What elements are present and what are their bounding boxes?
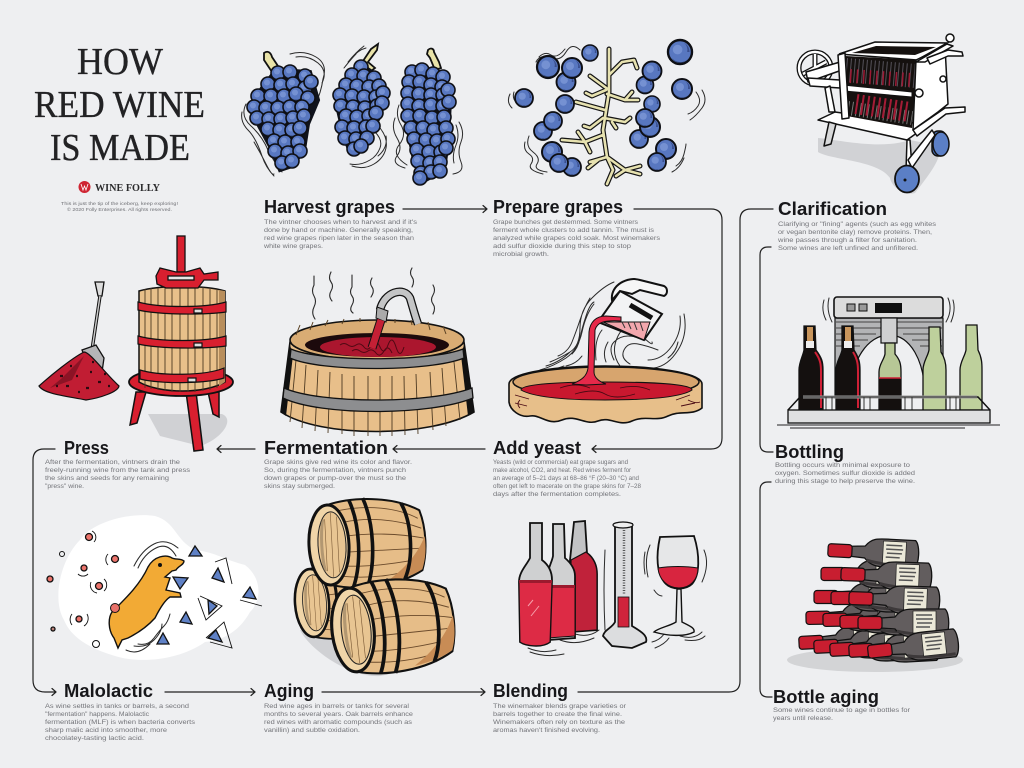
step: malolactic: As wine settles in tanks or barrels, a second [45, 703, 189, 710]
end plates [838, 34, 965, 136]
back wheel [932, 131, 949, 156]
step: prepare grapes: ferment whole clusters to add tannin. The must is [493, 227, 655, 234]
step: malolactic: Malolactic [64, 681, 153, 701]
press red bands [138, 302, 226, 383]
machine support [835, 318, 943, 398]
step: fermentation: skins stay submerged. [264, 483, 335, 490]
step: bottle aging: Some wines continue to age in bottles for [773, 707, 911, 714]
copyright note: This is just the tip of the iceberg, keep exploring! [61, 201, 178, 206]
step: blending: barrels together to create the final wine. [493, 711, 622, 718]
step: fermentation: Fermentation [264, 438, 388, 458]
step: add yeast [493, 438, 641, 498]
step: press: the skins and seeds for any remaining [45, 475, 169, 482]
step: aging [264, 681, 413, 734]
front wheel [895, 166, 919, 192]
step: prepare grapes: microbial growth. [493, 251, 549, 258]
step: add yeast: make alcohol, CO2, and heat. Red wines ferment for [493, 467, 632, 474]
step: bottle aging: Bottle aging [773, 687, 879, 707]
step: malolactic: chocolatey-tasting lactic acid. [45, 735, 144, 742]
bottles row 3 [814, 583, 922, 612]
step: press: freely-running wine from the tank and press [45, 467, 191, 474]
step: aging: Red wine ages in barrels or tanks for several [264, 703, 410, 710]
step: add yeast: Yeasts (wild or commercial) eat grape sugars and [493, 459, 628, 466]
pomace pile [39, 352, 119, 400]
step: fermentation: Grape skins give red wine its color and flavor. [264, 459, 412, 466]
logo: Wine Folly [78, 181, 160, 194]
vat rim [290, 318, 464, 360]
step: bottling: during this stage to help preserve the wine. [775, 478, 915, 485]
copyright note: © 2020 Folly Enterprises. All rights reserved. [67, 206, 172, 212]
arrow: add yeast to fermentation [393, 446, 485, 452]
pressure lines [530, 282, 694, 384]
step: fermentation: down grapes or pump-over the must so the [264, 475, 406, 482]
grape stem [562, 49, 640, 184]
logo: Wine Folly: WINE FOLLY [95, 183, 160, 194]
step: malolactic: fermentation (MLF) is when bacteria converts [45, 719, 196, 726]
shovel [82, 282, 104, 372]
step: malolactic: sharp malic acid into smoother, more [45, 727, 167, 734]
step: clarification: wine passes through a filter for sanitation. [777, 237, 917, 244]
step: aging: Aging [264, 681, 314, 701]
step: add yeast: often get left to macerate on the grape skins for 7–28 [493, 483, 641, 490]
arrow: aging to blending [322, 688, 485, 696]
step: bottle aging: years until release. [773, 715, 833, 722]
icon: malolactic bacteria [47, 515, 262, 660]
step: bottling [775, 442, 915, 485]
icon: yeast pouring [509, 279, 702, 423]
loose grapes [508, 40, 705, 176]
step: clarification: Some wines are left unfined and unfiltered. [778, 245, 918, 252]
bottle two [548, 524, 575, 640]
empty green bottles [923, 325, 982, 411]
hose [372, 292, 418, 348]
step: prepare grapes: Grape bunches get destemmed. Some vintners [493, 219, 639, 226]
arrow: blending to clarification [578, 209, 773, 692]
step: harvest grapes [263, 197, 418, 250]
step: malolactic: "fermentation" happens. Malolactic [45, 711, 150, 718]
step: bottling: Bottling occurs with minimal exposure to [775, 462, 910, 469]
step: press: Press [64, 438, 109, 458]
bottles row 5 [798, 624, 940, 665]
press base [129, 368, 233, 396]
step: blending: Winemakers often rely on texture as the [493, 719, 625, 726]
triangle cells [157, 546, 262, 648]
icon: destemmed grapes and stem [508, 40, 705, 184]
press screw [156, 236, 218, 288]
step: prepare grapes [493, 197, 661, 258]
top barrel [307, 495, 428, 591]
title: HOW [77, 41, 163, 83]
bottle three [570, 521, 597, 632]
barrel shadow [300, 630, 425, 676]
press barrel [139, 286, 225, 392]
white blob [58, 515, 258, 660]
arrow: bottling to bottle aging [760, 482, 772, 697]
step: add yeast: days after the fermentation completes. [493, 491, 621, 498]
step: clarification: Clarification [778, 199, 887, 219]
step: harvest grapes: red wine grapes ripen later in the season than [264, 235, 414, 242]
press shadow [148, 414, 227, 446]
step: prepare grapes: Prepare grapes [493, 197, 623, 217]
bottle shadow [787, 648, 963, 672]
title: RED WINE [34, 84, 205, 126]
pour stream [572, 316, 621, 385]
step: blending: aromas haven't finished evolving. [493, 727, 600, 734]
machine shadow [818, 138, 940, 194]
bacteria creature [109, 542, 184, 652]
icon: wine press [39, 236, 233, 451]
step: malolactic [45, 681, 196, 742]
step: harvest grapes: white wine grapes. [263, 243, 323, 250]
dark bottles [799, 326, 860, 410]
bottles row 1 [827, 536, 919, 569]
step: aging: months to several years. Oak barrels enhance [264, 711, 413, 718]
step: add yeast: Add yeast [493, 438, 581, 458]
front barrel [327, 572, 459, 679]
step: bottle aging [773, 687, 911, 722]
arrow: prepare to add yeast [592, 209, 722, 452]
copyright note [61, 201, 178, 212]
icon: blending bottles, cylinder and glass [519, 521, 707, 656]
dish [509, 366, 702, 423]
step: press: "press" wine. [45, 483, 84, 490]
step: add yeast: an average of 5–21 days at 68–86 °F (20–30 °C) and [493, 474, 639, 482]
bottles row 4 [806, 602, 931, 636]
icon: harvested grape clusters [242, 44, 463, 185]
step: aging: vanillin) and subtle oxidation. [264, 727, 360, 734]
title [34, 41, 205, 169]
wine glass [644, 536, 707, 635]
vat body [281, 342, 474, 432]
blending base lines [528, 550, 705, 656]
icon: bottling machine [777, 297, 1000, 428]
cluster one [242, 52, 324, 176]
step: harvest grapes: done by hand or machine. Generally speaking, [264, 227, 413, 234]
filter plates [839, 42, 947, 128]
arrow: harvest to prepare [403, 206, 487, 212]
conveyor platform [777, 397, 1000, 428]
step: press: After the fermentation, vintners drain the [45, 459, 180, 466]
pitcher [598, 279, 667, 340]
title: IS MADE [50, 127, 190, 169]
step: bottling: Bottling [775, 442, 844, 462]
step: harvest grapes: The vintner chooses when to harvest and if it's [264, 219, 418, 226]
step: blending [493, 681, 627, 734]
cluster three [393, 49, 463, 185]
hand wheel [799, 52, 831, 84]
step: press [45, 438, 191, 490]
step: harvest grapes: Harvest grapes [264, 197, 395, 217]
press legs [130, 392, 219, 451]
left barrel [292, 559, 396, 642]
icon: stacked oak barrels [292, 495, 459, 679]
icon: stacked aging bottles [787, 536, 963, 672]
small round cells [47, 531, 118, 648]
bottles row 2 [821, 560, 912, 588]
arrow: press to malolactic [33, 449, 56, 696]
arrow: clarification to bottling [760, 247, 773, 452]
filling bottle [879, 343, 901, 411]
front column [841, 560, 960, 666]
cluster two [333, 44, 390, 168]
machine head [823, 297, 954, 343]
step: clarification [777, 199, 937, 252]
step: prepare grapes: analyzed while grapes cold soak. Most winemakers [493, 235, 661, 242]
step: prepare grapes: add sulfur dioxide during this step to stop [493, 243, 631, 250]
step: clarification: Clarifying or "fining" agents (such as egg whites [778, 221, 937, 228]
step: clarification: or vegan bentonite clay) remove proteins. Then, [778, 229, 932, 236]
vat staves [290, 360, 460, 436]
step: blending: Blending [493, 681, 568, 701]
cart frame [806, 62, 935, 170]
arrow: malolactic to aging [165, 688, 255, 696]
steam lines [312, 268, 434, 319]
icon: filter machine [799, 34, 965, 194]
step: fermentation: So, during the fermentation, vintners punch [264, 467, 406, 474]
arrow: fermentation to press [217, 446, 255, 452]
step: aging: red wines with aromatic compounds (such as [264, 719, 413, 726]
bottle one [519, 523, 552, 646]
graduated cylinder [603, 522, 646, 648]
icon: fermentation vat [281, 268, 474, 436]
step: blending: The winemaker blends grape varieties or [493, 703, 627, 710]
vat iron bands [283, 349, 473, 412]
step: bottling: oxygen. Sometimes sulfur dioxide is added [775, 470, 915, 477]
step: fermentation [264, 438, 412, 490]
